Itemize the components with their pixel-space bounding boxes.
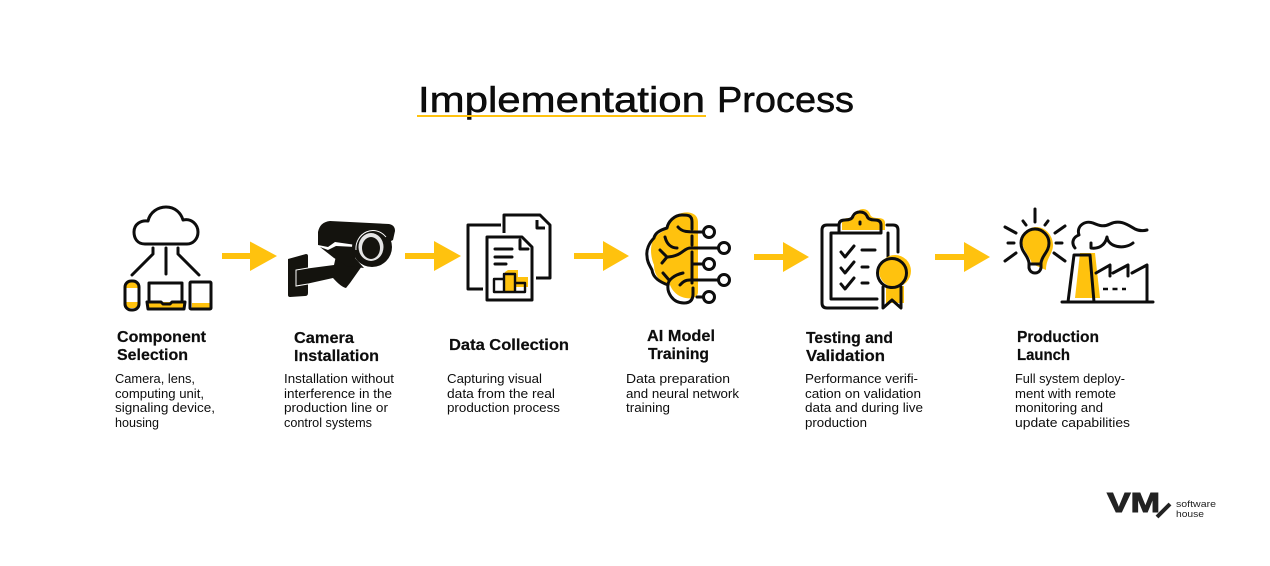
logo (1107, 487, 1216, 520)
step 3 text: production process (447, 401, 560, 415)
icon: light bulb (1005, 209, 1065, 273)
step 6 text: ment with remote (1015, 387, 1116, 401)
step 1 text: computing unit, (115, 387, 204, 401)
step 2 heading (294, 330, 379, 365)
step 6 heading: Production (1017, 329, 1099, 346)
arrow 4 (754, 242, 809, 272)
logo: house (1176, 509, 1204, 520)
step 4 text: and neural network (626, 387, 740, 401)
step 2 text: control systems (284, 416, 372, 430)
step 5 text: production (805, 416, 867, 430)
step 3 text: Capturing visual (447, 372, 542, 386)
step 6 text: monitoring and (1015, 401, 1103, 415)
logo: software (1176, 499, 1216, 510)
step 1 heading: Component (117, 329, 206, 346)
step 5 text: data and during live (805, 401, 923, 415)
icon: clipboard and medal (822, 209, 911, 308)
step 3 heading: Data Collection (449, 337, 569, 354)
icon: cloud and devices (125, 207, 211, 310)
icon: AI brain (647, 212, 730, 303)
step 4 heading: AI Model (647, 328, 715, 345)
step 5 text: Performance verifi- (805, 372, 918, 386)
step 2 text: interference in the (284, 387, 392, 401)
step 2 heading: Camera (294, 330, 354, 347)
step 5 text (805, 372, 923, 430)
step 1 text: Camera, lens, (115, 372, 195, 386)
step 6 heading: Launch (1017, 347, 1070, 364)
title: Implementation (418, 79, 705, 120)
step 3 text: data from the real (447, 387, 555, 401)
step 1 heading (117, 329, 206, 364)
step 5 heading (806, 330, 893, 365)
step 1 text (115, 372, 215, 430)
step 6 text (1015, 372, 1130, 430)
step 2 text: Installation without (284, 372, 395, 386)
title (417, 79, 854, 120)
step 4 text: training (626, 401, 670, 415)
step 6 heading (1017, 329, 1099, 364)
icon: factory (1062, 222, 1153, 302)
step 4 text: Data preparation (626, 372, 730, 386)
step 6 text: update capabilities (1015, 416, 1130, 430)
step 4 heading: Training (648, 346, 709, 363)
step 5 heading: Testing and (806, 330, 893, 347)
step 1 text: housing (115, 416, 159, 430)
step 4 text (626, 372, 740, 415)
step 1 heading: Selection (117, 347, 188, 364)
logo: VM (1107, 487, 1160, 518)
title: Process (717, 79, 854, 120)
step 5 text: cation on validation (805, 387, 921, 401)
arrow 1 (222, 242, 277, 271)
step 1 text: signaling device, (115, 401, 215, 415)
step 2 text: production line or (284, 401, 388, 415)
arrow 5 (935, 242, 990, 272)
step 2 text (284, 372, 395, 430)
step 4 heading (647, 328, 715, 363)
step 5 heading: Validation (806, 348, 885, 365)
arrow 3 (574, 241, 629, 271)
step 3 text (447, 372, 560, 415)
icon: security camera (288, 221, 395, 297)
arrow 2 (405, 241, 461, 271)
step 6 text: Full system deploy- (1015, 372, 1125, 386)
icon: documents (468, 215, 550, 300)
step 2 heading: Installation (294, 348, 379, 365)
